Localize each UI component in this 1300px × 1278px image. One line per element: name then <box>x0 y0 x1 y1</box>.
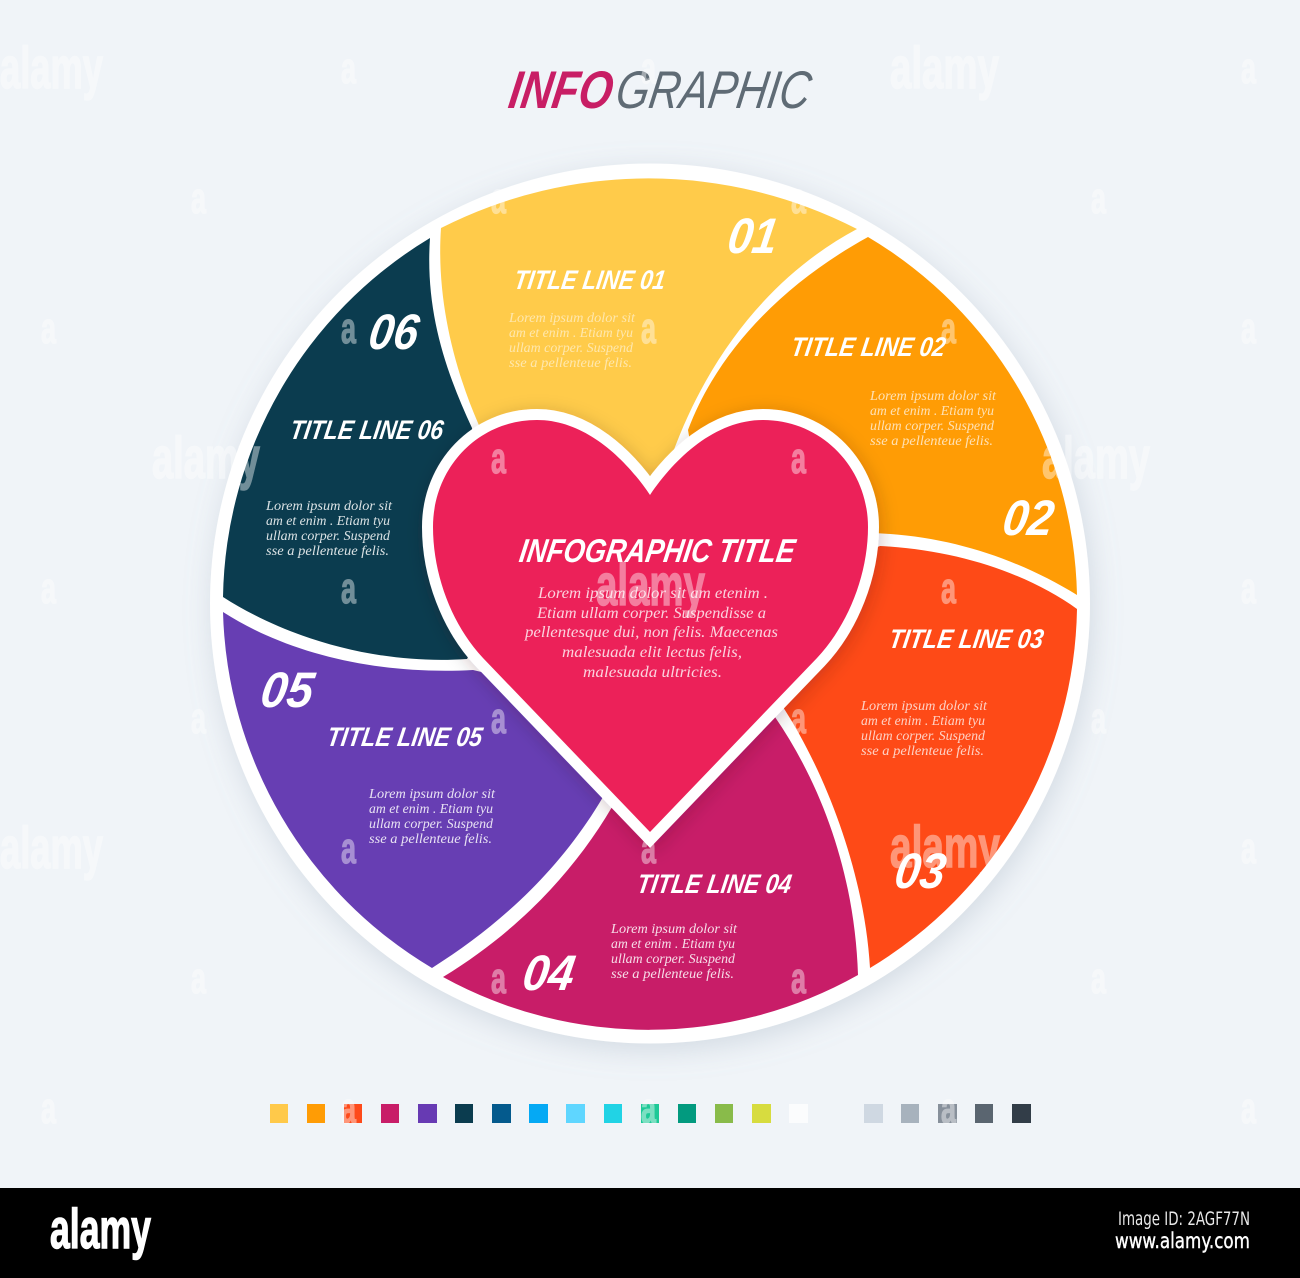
heart text block: Lorem ipsum dolor sit am etenim . <box>537 585 768 602</box>
text block 06: Lorem ipsum dolor sit <box>265 498 393 513</box>
watermarks: a <box>1241 44 1256 93</box>
number 02: 02 <box>999 489 1058 546</box>
text block 01: am et enim . Etiam tyu <box>509 325 633 340</box>
text block 02: am et enim . Etiam tyu <box>870 403 994 418</box>
heading 04: TITLE LINE 04 <box>635 868 794 899</box>
watermarks: alamy <box>0 36 103 101</box>
text block 04: Lorem ipsum dolor sit <box>610 921 738 936</box>
text block 04: am et enim . Etiam tyu <box>611 936 735 951</box>
panel: segment 04 <box>443 700 858 1030</box>
watermarks: a <box>341 44 356 93</box>
footer bar <box>0 1188 1300 1278</box>
watermarks: a <box>1241 1084 1256 1133</box>
watermarks: a <box>1241 304 1256 353</box>
segment 02 shape <box>688 237 1077 595</box>
text block 05: ullam corper. Suspend <box>369 816 493 831</box>
text block 01: sse a pellenteue felis. <box>509 355 632 370</box>
watermarks: a <box>41 1084 56 1133</box>
watermarks: a <box>41 304 56 353</box>
watermarks: alamy <box>596 553 705 618</box>
text block 06 <box>265 498 393 558</box>
text block 04: ullam corper. Suspend <box>611 951 735 966</box>
watermarks: a <box>641 304 656 353</box>
watermarks: a <box>791 434 806 483</box>
panel: segment 06 <box>223 238 500 660</box>
segment 01 shape <box>440 178 857 520</box>
text block 03: am et enim . Etiam tyu <box>861 713 985 728</box>
watermarks: a <box>491 694 506 743</box>
colour palette <box>270 1104 1031 1123</box>
heading 03: TITLE LINE 03 <box>887 623 1046 654</box>
heart heading: INFOGRAPHIC TITLE <box>517 533 798 570</box>
heart fill <box>433 420 868 832</box>
watermarks: a <box>1091 954 1106 1003</box>
panel: center heart <box>433 420 868 832</box>
watermarks: a <box>941 564 956 613</box>
text block 05 <box>368 786 496 846</box>
watermarks: alamy <box>1042 426 1150 491</box>
text block 02: sse a pellenteue felis. <box>870 433 993 448</box>
text block 01: ullam corper. Suspend <box>509 340 633 355</box>
title <box>505 61 816 120</box>
text block 06: sse a pellenteue felis. <box>266 543 389 558</box>
image id: Image ID: 2AGF77N <box>1118 1208 1250 1230</box>
text block 01: Lorem ipsum dolor sit <box>508 310 636 325</box>
text block 06: ullam corper. Suspend <box>266 528 390 543</box>
watermarks: a <box>341 824 356 873</box>
text block 02 <box>869 388 997 448</box>
watermarks: a <box>341 304 356 353</box>
watermarks: a <box>41 564 56 613</box>
text block 01 <box>508 310 636 370</box>
watermarks: a <box>641 824 656 873</box>
title: GRAPHIC <box>612 61 816 120</box>
panel: segment 01 <box>440 178 857 520</box>
watermarks: a <box>941 1084 956 1133</box>
text block 03 <box>860 698 988 758</box>
white circle base <box>210 164 1090 1044</box>
number 01: 01 <box>724 207 782 264</box>
panel: segment 05 <box>223 612 603 968</box>
watermarks: a <box>791 694 806 743</box>
watermarks: alamy <box>0 816 103 881</box>
segment 04 shape <box>443 700 858 1030</box>
watermarks: alamy <box>152 426 260 491</box>
heart text block: Etiam ullam corper. Suspendisse a <box>536 605 766 622</box>
watermarks: a <box>341 1084 356 1133</box>
watermarks: alamy <box>890 36 999 101</box>
watermarks: a <box>941 304 956 353</box>
watermarks: a <box>341 564 356 613</box>
heading 06: TITLE LINE 06 <box>288 414 447 445</box>
footer logo: alamy <box>50 1197 151 1260</box>
segment 05 shape <box>223 612 603 968</box>
number 04: 04 <box>519 944 579 1001</box>
watermarks: a <box>491 954 506 1003</box>
text block 05: sse a pellenteue felis. <box>369 831 492 846</box>
panel: segment 03 <box>750 546 1077 968</box>
heart text block: malesuada elit lectus felis, <box>562 644 742 661</box>
segment 03 shape <box>750 546 1077 968</box>
heading 02: TITLE LINE 02 <box>789 331 948 362</box>
watermarks: a <box>191 954 206 1003</box>
watermarks: a <box>191 174 206 223</box>
heading 05: TITLE LINE 05 <box>325 721 486 752</box>
heart text block <box>524 585 778 681</box>
heart white outline <box>433 420 868 832</box>
text block 05: Lorem ipsum dolor sit <box>368 786 496 801</box>
watermarks: a <box>1091 174 1106 223</box>
text block 02: Lorem ipsum dolor sit <box>869 388 997 403</box>
watermarks: a <box>791 954 806 1003</box>
watermarks: a <box>1241 824 1256 873</box>
text block 03: sse a pellenteue felis. <box>861 743 984 758</box>
watermarks: a <box>1241 564 1256 613</box>
text block 04 <box>610 921 738 981</box>
watermarks: a <box>491 434 506 483</box>
heart text block: malesuada ultricies. <box>583 664 722 681</box>
watermarks: alamy <box>890 815 1000 880</box>
number 03: 03 <box>891 842 950 899</box>
text block 05: am et enim . Etiam tyu <box>369 801 493 816</box>
watermarks: a <box>491 174 506 223</box>
watermarks: a <box>641 1084 656 1133</box>
website: www.alamy.com <box>1115 1229 1250 1253</box>
heart text block: pellentesque dui, non felis. Maecenas <box>524 624 778 641</box>
number 05: 05 <box>257 661 319 718</box>
text block 03: ullam corper. Suspend <box>861 728 985 743</box>
text block 04: sse a pellenteue felis. <box>611 966 734 981</box>
watermarks: a <box>1091 694 1106 743</box>
watermarks: a <box>641 44 656 93</box>
watermarks: a <box>791 174 806 223</box>
panel: segment 02 <box>688 237 1077 595</box>
text block 06: am et enim . Etiam tyu <box>266 513 390 528</box>
number 06: 06 <box>365 303 424 360</box>
title: INFO <box>505 61 617 120</box>
text block 02: ullam corper. Suspend <box>870 418 994 433</box>
segment 06 shape <box>223 238 500 660</box>
text block 03: Lorem ipsum dolor sit <box>860 698 988 713</box>
heading 01: TITLE LINE 01 <box>512 264 668 295</box>
watermarks: a <box>191 694 206 743</box>
